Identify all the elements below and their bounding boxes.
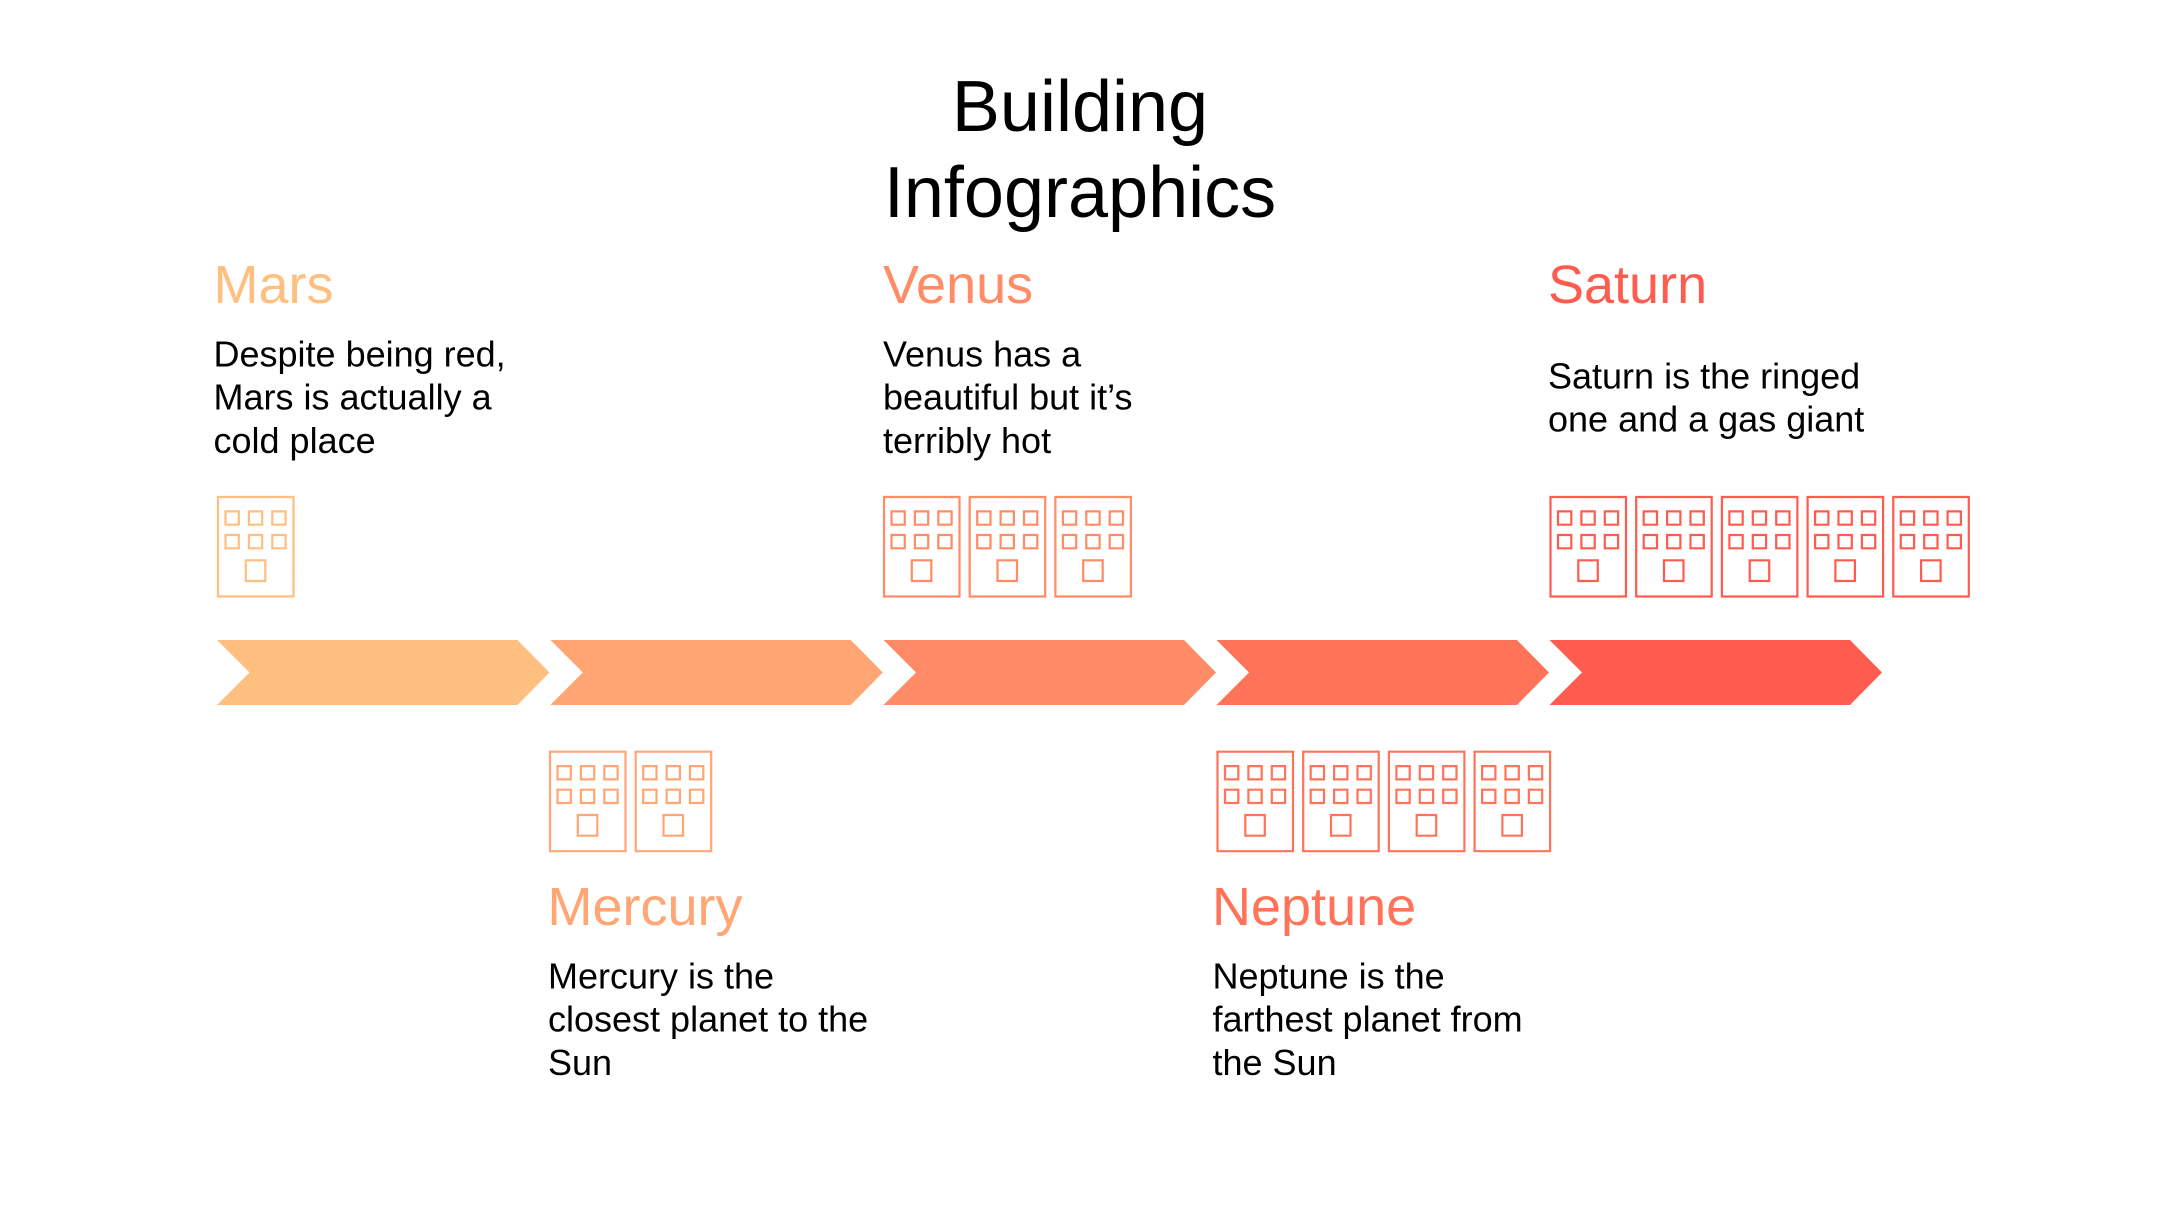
text block: Venus description: Venus has a — [883, 334, 1082, 374]
text block: Neptune description: Neptune is the — [1212, 956, 1445, 996]
heading: Mercury: Mercury — [548, 877, 743, 937]
text block: Mercury description: closest planet to the — [548, 999, 868, 1040]
panel: Mercury — [548, 752, 868, 1083]
title: Infographics — [884, 153, 1276, 233]
text block: Saturn description: one and a gas giant — [1548, 399, 1864, 440]
heading: Saturn: Saturn — [1548, 255, 1707, 315]
text block: Mars description: Mars is actually a — [214, 377, 493, 418]
panel: Neptune — [1212, 752, 1550, 1083]
arrow: Saturn — [1550, 640, 1882, 705]
arrow: Neptune — [1216, 640, 1549, 705]
text block: Mercury description: Sun — [548, 1042, 612, 1083]
text block: Mercury description: Mercury is the — [548, 956, 774, 996]
text block: Venus description: terribly hot — [883, 420, 1051, 461]
panel: Mars — [214, 255, 506, 596]
arrow: Mercury — [550, 640, 883, 705]
text block: Neptune description: the Sun — [1212, 1042, 1337, 1083]
text block: Saturn description: Saturn is the ringed — [1548, 356, 1860, 396]
icon: buildings x5 — [1550, 497, 1969, 596]
panel: Saturn — [1548, 255, 1969, 596]
timeline arrows — [217, 640, 1882, 705]
heading: Mars: Mars — [214, 255, 334, 315]
heading: Neptune: Neptune — [1212, 877, 1416, 937]
text block: Mars description: cold place — [214, 420, 376, 461]
text block: Venus description: beautiful but it’s — [883, 377, 1133, 418]
title — [884, 67, 1276, 233]
arrow: Mars — [217, 640, 550, 705]
text block: Neptune description: farthest planet from — [1212, 999, 1523, 1040]
icon: buildings x4 — [1218, 752, 1550, 851]
heading: Venus: Venus — [883, 255, 1033, 315]
panel: Venus — [883, 255, 1133, 596]
text block: Mars description: Despite being red, — [214, 334, 506, 374]
title: Building — [952, 67, 1208, 147]
icon: buildings x2 — [550, 752, 711, 851]
icon: buildings x3 — [884, 497, 1131, 596]
icon: building x1 — [218, 497, 294, 596]
arrow: Venus — [884, 640, 1216, 705]
